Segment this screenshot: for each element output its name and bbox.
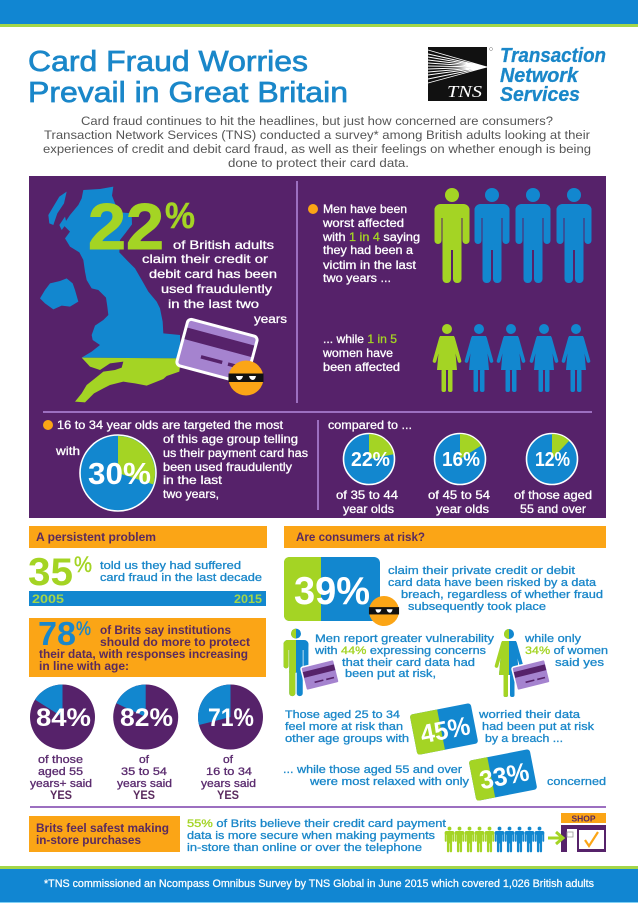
22 percent figure: 22 <box>88 190 164 263</box>
callout: 78 percent: in line with age: <box>39 661 129 673</box>
text: worried their data <box>478 709 594 745</box>
title <box>28 46 348 109</box>
text: 16 to 34 year olds: 16 to 34 year olds are targeted the most <box>57 418 284 432</box>
text: British adults: of British adults <box>173 238 274 252</box>
icon: shop: SHOP <box>571 814 596 824</box>
pie chart: 12 percent: 12% <box>535 449 570 471</box>
text: women affected: ... while 1 in 5 <box>323 332 397 346</box>
callout: in-store purchases: Brits feel safest making <box>36 823 169 835</box>
captions: said yes by age: years+ said <box>30 778 92 790</box>
timeline bar 2005 to 2015: 2015 <box>234 592 262 606</box>
captions: said yes by age: YES <box>133 790 155 802</box>
intro text: Transaction Network Services (TNS) conducted a survey* among British adults looking at their <box>44 128 590 142</box>
text: men affected: they had been a <box>323 243 413 257</box>
text: 55 percent of Brits: 55% of Brits believe their credit card payment <box>187 818 447 830</box>
text: those aged 25 to 34 <box>285 709 409 745</box>
text: 16 to 34 year olds: with <box>55 444 80 458</box>
text: British adults: used fraudulently <box>161 282 272 296</box>
text: men affected: worst affected <box>322 216 404 230</box>
text: those aged 55 and over <box>283 764 469 788</box>
icon: woman with card <box>496 629 550 697</box>
pie chart: 71 percent: 71% <box>208 704 254 732</box>
icon: masked robber small <box>369 596 399 626</box>
text: data breach claim: claim their private credit or debit <box>388 565 576 577</box>
22 percent figure: % <box>165 195 195 236</box>
icons: five women, one highlighted <box>434 324 588 392</box>
captions: said yes by age: years said <box>117 778 172 790</box>
captions: said yes by age: of <box>223 754 234 766</box>
captions: said yes by age <box>30 754 256 802</box>
text: data breach claim: card data have been risked by a data <box>388 577 597 589</box>
panel: fraud victims <box>29 176 606 518</box>
text: 16 to 34 year olds: been used fraudulently <box>163 460 292 474</box>
captions: said yes by age: YES <box>50 790 72 802</box>
timeline bar 2005 to 2015: 2005 <box>32 592 64 606</box>
captions: older age groups: year olds <box>343 502 394 516</box>
stat: 35 percent <box>28 551 262 594</box>
text: 16 to 34 year olds: two years, <box>163 487 219 501</box>
pie chart: 30 percent: 30% <box>88 456 151 491</box>
text: those aged 25 to 34: other age groups with <box>285 733 409 745</box>
stat: 35 percent: 35 <box>28 551 73 594</box>
tag: 45 percent: 45% <box>418 710 473 749</box>
text: British adults: claim their credit or <box>142 252 268 266</box>
logo: Transaction Network Services: Network <box>500 65 579 87</box>
text: men affected: victim in the last <box>323 258 417 272</box>
callout: in-store purchases: in-store purchases <box>36 835 141 847</box>
pie chart: 30 percent <box>80 435 156 511</box>
icon: masked robber <box>228 360 264 396</box>
timeline bar 2005 to 2015 <box>29 591 266 606</box>
text: women affected <box>322 332 400 374</box>
captions: said yes by age: YES <box>217 790 239 802</box>
captions: said yes by age: years said <box>201 778 256 790</box>
text: data breach claim <box>388 565 603 613</box>
captions: older age groups: of those aged <box>514 488 592 502</box>
callout: 78 percent <box>29 615 266 677</box>
text: men vulnerability <box>314 633 494 680</box>
footer <box>0 866 638 903</box>
text: concerned: concerned <box>547 776 606 788</box>
captions: said yes by age: 16 to 34 <box>206 766 252 778</box>
text: men vulnerability: with 44% expressing concerns <box>314 645 486 657</box>
text: 16 to 34 year olds: in the last <box>163 473 223 487</box>
pie chart: 82 percent <box>113 684 178 750</box>
captions: said yes by age: of <box>139 754 150 766</box>
stat: 35 percent: % <box>74 552 92 577</box>
callout: 78 percent: their data, with responses increasing <box>39 649 248 661</box>
text: men affected <box>322 202 420 285</box>
top band <box>0 0 638 27</box>
logo: Transaction Network Services: Transaction <box>500 45 606 67</box>
text: 16 to 34 year olds <box>55 418 308 501</box>
pie chart: 22 percent <box>344 434 394 484</box>
text: women vulnerability: said yes <box>555 657 604 669</box>
text: those aged 25 to 34: feel more at risk than <box>285 721 403 733</box>
captions: older age groups: year olds <box>436 502 489 516</box>
icons: row of ten people <box>445 827 544 852</box>
text: those aged 55 and over: were most relaxed with only <box>309 776 469 788</box>
captions: older age groups: of 35 to 44 <box>336 488 398 502</box>
text: women affected: women have <box>322 346 393 360</box>
pie chart: 16 percent <box>434 434 486 484</box>
text: 55 percent of Brits <box>187 818 447 854</box>
text: British adults: debit card has been <box>149 267 277 281</box>
captions: said yes by age: aged 55 <box>38 766 83 778</box>
text: compared to: compared to ... <box>328 418 412 432</box>
stat block: 39 percent <box>284 557 380 621</box>
icon: man with card <box>284 629 339 696</box>
heading: are consumers at risk <box>284 526 606 548</box>
text: worried their data: by a breach ... <box>485 733 563 745</box>
pie chart: 82 percent: 82% <box>120 704 173 732</box>
icons: four men, one highlighted <box>434 188 592 283</box>
tag: 33 percent <box>469 749 537 801</box>
text: those aged 25 to 34: Those aged 25 to 34 <box>285 709 400 721</box>
text: data breach claim: breach, regardless of whether fraud <box>401 589 603 601</box>
text: 55 percent of Brits: in-store than online or over the telephone <box>187 842 422 854</box>
title: Card Fraud Worries <box>28 46 308 78</box>
text: women vulnerability: while only <box>524 633 581 645</box>
pie chart: 84 percent <box>30 684 95 750</box>
tag: 45 percent <box>410 703 478 755</box>
pie chart: 84 percent: 84% <box>36 704 91 732</box>
text: men affected: two years ... <box>323 271 391 285</box>
heading: a persistent problem <box>29 526 267 548</box>
text: 16 to 34 year olds: of this age group telling <box>163 432 298 446</box>
callout: 78 percent: % <box>76 619 91 640</box>
intro text: experiences of credit and debit card fraud, as well as their feelings on whether enough is being <box>43 142 591 156</box>
intro text: done to protect their card data. <box>228 156 409 170</box>
text: worried their data: worried their data <box>478 709 581 721</box>
footer: *TNS commissioned an Ncompass Omnibus Survey by TNS Global in June 2015 which covered 1,026 British adults <box>44 878 594 890</box>
text: men vulnerability: Men report greater vulnerability <box>315 633 494 645</box>
title: Prevail in Great Britain <box>28 77 348 109</box>
text: British adults: in the last two <box>168 297 259 311</box>
icon: shop <box>561 813 606 852</box>
text: men vulnerability: that their card data had <box>342 657 475 669</box>
divider <box>30 806 606 808</box>
text: worried their data: had been put at risk <box>482 721 594 733</box>
logo: Transaction Network Services <box>428 45 606 106</box>
captions: said yes by age: of those <box>38 754 83 766</box>
stat: 35 percent: told us they had suffered <box>100 560 241 572</box>
captions: older age groups <box>336 488 592 516</box>
text: those aged 55 and over: ... while those aged 55 and over <box>283 764 462 776</box>
tag: 33 percent: 33% <box>477 756 532 795</box>
logo: Transaction Network Services: TNS <box>447 82 483 101</box>
captions: said yes by age: 35 to 54 <box>121 766 167 778</box>
text: men vulnerability: been put at risk, <box>345 668 436 680</box>
callout: 78 percent: should do more to protect <box>100 637 250 649</box>
captions: older age groups: 55 and over <box>520 502 586 516</box>
bullet: men <box>308 204 318 214</box>
logo: Transaction Network Services: Services <box>500 84 580 106</box>
pie chart: 71 percent <box>198 684 263 750</box>
text: women vulnerability <box>524 633 608 669</box>
icon: credit card <box>176 319 258 383</box>
intro text <box>43 114 591 170</box>
heading: are consumers at risk: Are consumers at risk? <box>296 532 425 544</box>
stat: 35 percent: card fraud in the last decade <box>100 572 262 584</box>
text: women affected: been affected <box>323 360 400 374</box>
captions: older age groups: of 45 to 54 <box>428 488 490 502</box>
text: British adults: years <box>254 312 287 326</box>
pie chart: 12 percent <box>526 434 578 484</box>
intro text: Card fraud continues to hit the headlines, but just how concerned are consumers? <box>81 114 553 128</box>
text: data breach claim: subsequently took place <box>408 601 546 613</box>
text: British adults <box>142 238 287 326</box>
text: women vulnerability: 34% of women <box>525 645 608 657</box>
callout: 78 percent: of Brits say institutions <box>100 625 231 637</box>
callout: 78 percent: 78 <box>38 615 76 652</box>
text: men affected: Men have been <box>323 202 407 216</box>
callout: in-store purchases <box>29 816 180 852</box>
bullet: age group <box>43 420 53 430</box>
text: men affected: with 1 in 4 saying <box>322 230 420 244</box>
stat block: 39 percent: 39% <box>294 570 370 613</box>
text: 55 percent of Brits: data is more secure when making payments <box>187 830 435 842</box>
arrow into shop <box>548 832 563 844</box>
pie chart: 22 percent: 22% <box>351 449 390 471</box>
pie chart: 16 percent: 16% <box>442 449 480 471</box>
22 percent figure <box>88 190 195 263</box>
text: 16 to 34 year olds: us their payment card has <box>163 446 308 460</box>
heading: a persistent problem: A persistent problem <box>36 532 156 544</box>
map of Britain <box>40 187 181 402</box>
